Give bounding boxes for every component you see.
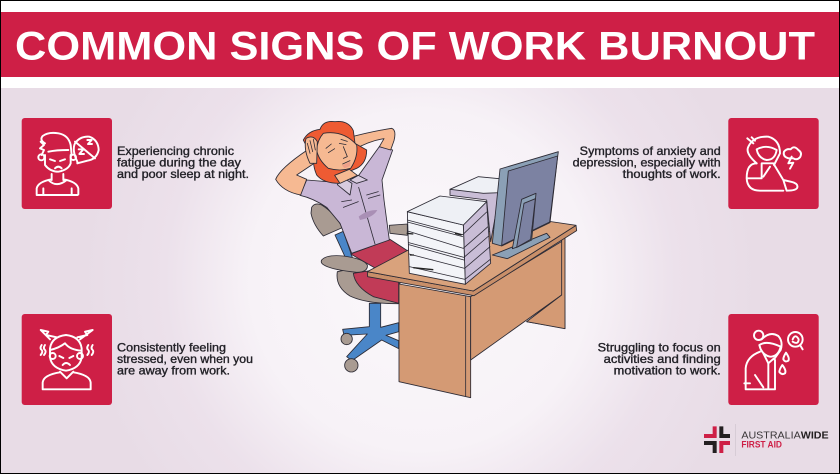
text: stressed, even when you — [117, 353, 253, 366]
text — [573, 145, 721, 181]
icon: sad person with tangled thought — [744, 331, 803, 389]
title: COMMON SIGNS OF WORK BURNOUT — [15, 24, 815, 68]
illustration: woman at desk — [276, 121, 577, 398]
text: Struggling to focus on — [598, 342, 721, 354]
logo wordmark: FIRST AID — [741, 439, 782, 449]
text: Consistently feeling — [117, 342, 226, 354]
woman head — [303, 121, 367, 183]
text: depression, especially with — [573, 157, 721, 170]
panel: chronic fatigue — [22, 118, 249, 209]
text: Experiencing chronic — [117, 145, 234, 158]
card — [728, 118, 819, 209]
back stack of papers — [450, 177, 499, 242]
text — [117, 342, 253, 378]
text: and poor sleep at night. — [117, 168, 249, 181]
chair armrest — [321, 256, 367, 272]
panel: anxiety — [573, 118, 819, 209]
text — [117, 145, 249, 181]
desk — [367, 220, 577, 398]
logo cross mark — [704, 424, 736, 456]
card — [22, 314, 112, 405]
panel: focus — [598, 314, 819, 405]
title banner — [1, 12, 839, 77]
woman arms — [276, 128, 395, 195]
icon: curled up person with storm cloud — [747, 137, 801, 191]
logo wordmark — [741, 430, 829, 449]
logo wordmark: AUSTRALIAWIDE — [741, 430, 829, 441]
icon: tired person with sleep bubble — [37, 133, 99, 195]
text: fatigue during the day — [117, 157, 241, 170]
red skirt — [351, 239, 407, 303]
monitor — [492, 152, 558, 259]
text: thoughts of work. — [623, 168, 721, 181]
card — [728, 314, 819, 405]
text: activities and finding — [604, 353, 721, 366]
text — [598, 342, 721, 378]
front stack of papers — [407, 196, 491, 284]
text: Symptoms of anxiety and — [580, 145, 721, 158]
logo: Australia Wide First Aid — [704, 424, 829, 456]
chair — [311, 204, 407, 372]
text: motivation to work. — [614, 365, 721, 378]
icon: stressed person — [40, 330, 93, 389]
text: are away from work. — [117, 365, 230, 378]
card — [22, 118, 112, 209]
panel: stress — [22, 314, 253, 405]
woman torso — [300, 147, 393, 253]
